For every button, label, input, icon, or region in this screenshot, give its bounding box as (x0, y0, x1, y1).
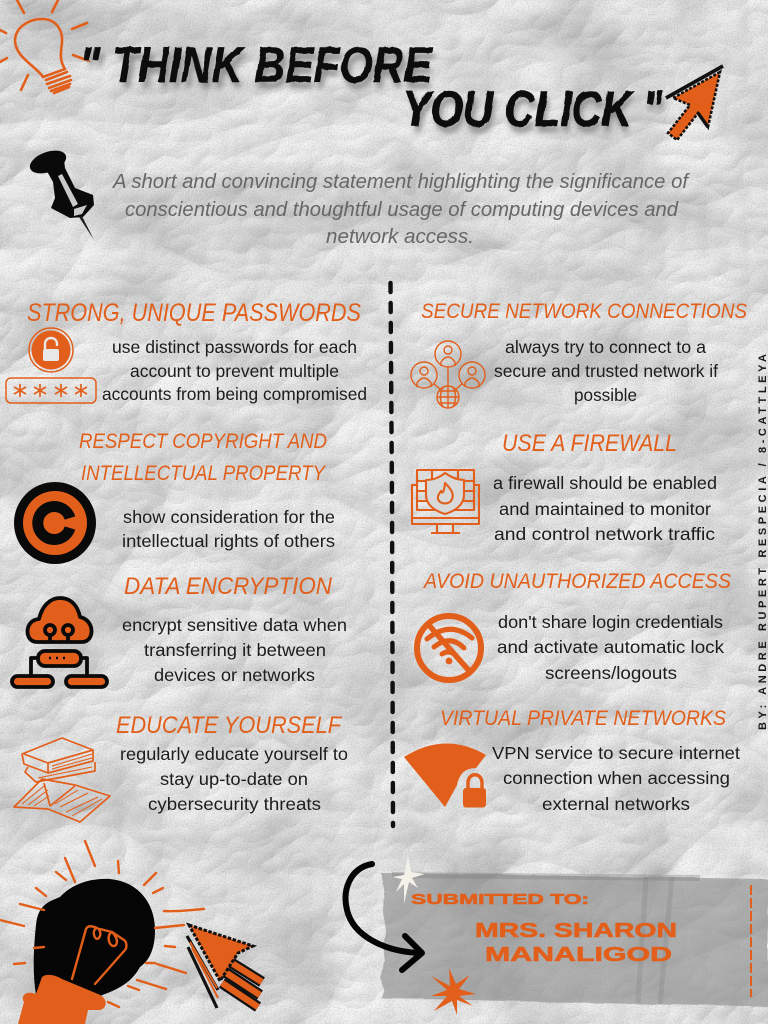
body: strong passwords: account to prevent multiple (130, 361, 339, 381)
icon: top pixel cursor (666, 66, 723, 140)
body: strong passwords: accounts from being compromised (102, 384, 367, 404)
body: educate yourself: regularly educate yourself to (120, 744, 348, 764)
body: unauthorized access (497, 612, 724, 683)
body: firewall: a firewall should be enabled (493, 473, 717, 493)
title: " THINK BEFORE (80, 37, 433, 93)
icon: stacked orange cursor (187, 925, 262, 1008)
panel: educate yourself (14, 712, 348, 822)
body: data encryption: encrypt sensitive data when (122, 615, 347, 635)
body: secure network: secure and trusted network if (494, 361, 718, 381)
submitted to text: MRS. SHARON (475, 920, 677, 942)
heading: firewall: USE A FIREWALL (502, 430, 677, 457)
decorative white star (392, 856, 425, 904)
dashed column divider (390, 283, 393, 826)
body: vpn (492, 743, 740, 814)
orange dashed line (750, 885, 752, 997)
panel: secure network (411, 300, 747, 408)
icon: copyright symbol (14, 482, 96, 564)
body: vpn: VPN service to secure internet (492, 743, 740, 763)
panel: strong passwords (6, 299, 367, 404)
panel: vpn (404, 707, 740, 814)
intro statement: conscientious and thoughtful usage of computing devices and (125, 198, 679, 221)
body: vpn: external networks (542, 794, 690, 814)
arrow: curved black arrow (346, 864, 422, 970)
heading: data encryption: DATA ENCRYPTION (124, 573, 333, 600)
body: respect copyright: show consideration for the (123, 507, 335, 527)
body: data encryption: transferring it between (144, 640, 326, 660)
body: firewall: and control network traffic (494, 524, 715, 544)
grey tape panel (380, 873, 768, 1007)
body: vpn: connection when accessing (503, 768, 730, 788)
title (80, 37, 665, 143)
icon: cloud network (12, 598, 107, 687)
body: secure network: possible (574, 385, 637, 405)
icon: firewall monitor (412, 470, 479, 533)
submitted to text (411, 891, 677, 966)
body: data encryption: devices or networks (154, 665, 315, 685)
decorative orange star (431, 968, 476, 1015)
body: educate yourself: stay up-to-date on (160, 769, 308, 789)
title: " THINK BEFORE (84, 43, 435, 99)
body: respect copyright: intellectual rights of others (122, 531, 335, 551)
icon: connected users globe (411, 341, 485, 408)
body: firewall (493, 473, 717, 544)
body: strong passwords: use distinct passwords for each (112, 337, 357, 357)
heading: respect copyright (79, 430, 327, 485)
body: educate yourself (120, 744, 348, 814)
icon: large black light bulb (0, 841, 204, 1024)
body: respect copyright (122, 507, 335, 551)
heading: respect copyright: INTELLECTUAL PROPERTY (81, 462, 327, 485)
panel: unauthorized access (417, 570, 731, 683)
intro statement: network access. (326, 225, 474, 248)
body: data encryption (122, 615, 347, 685)
body: unauthorized access: screens/logouts (545, 663, 677, 683)
body: strong passwords (102, 337, 367, 404)
body: unauthorized access: don't share login credentials (498, 612, 723, 632)
icon: books (14, 738, 110, 822)
title: YOU CLICK " (403, 81, 664, 137)
icon: wifi fan with padlock (404, 743, 486, 808)
intro statement (111, 170, 690, 248)
body: educate yourself: cybersecurity threats (148, 794, 321, 814)
body: secure network (494, 337, 718, 405)
body: firewall: and maintained to monitor (499, 499, 711, 519)
submitted to text: MANALIGOD (485, 944, 672, 966)
intro statement: A short and convincing statement highlighting the significance of (111, 170, 690, 193)
panel: firewall (412, 430, 717, 544)
heading: unauthorized access: AVOID UNAUTHORIZED ACCESS (422, 570, 731, 593)
panel: data encryption (12, 573, 347, 687)
title: YOU CLICK " (406, 87, 665, 143)
icon: push pin (27, 146, 94, 240)
heading: strong passwords: STRONG, UNIQUE PASSWORDS (27, 299, 361, 327)
heading: vpn: VIRTUAL PRIVATE NETWORKS (440, 707, 726, 730)
heading: educate yourself: EDUCATE YOURSELF (116, 712, 342, 739)
submitted to text: SUBMITTED TO: (411, 891, 589, 908)
icon: no wifi (417, 616, 481, 680)
icon: top light bulb (0, 0, 89, 93)
icon: lock and password field (6, 328, 96, 403)
panel: respect copyright (14, 430, 335, 564)
body: secure network: always try to connect to a (505, 337, 706, 357)
heading: respect copyright: RESPECT COPYRIGHT AND (79, 430, 327, 453)
body: unauthorized access: and activate automatic lock (497, 637, 724, 657)
